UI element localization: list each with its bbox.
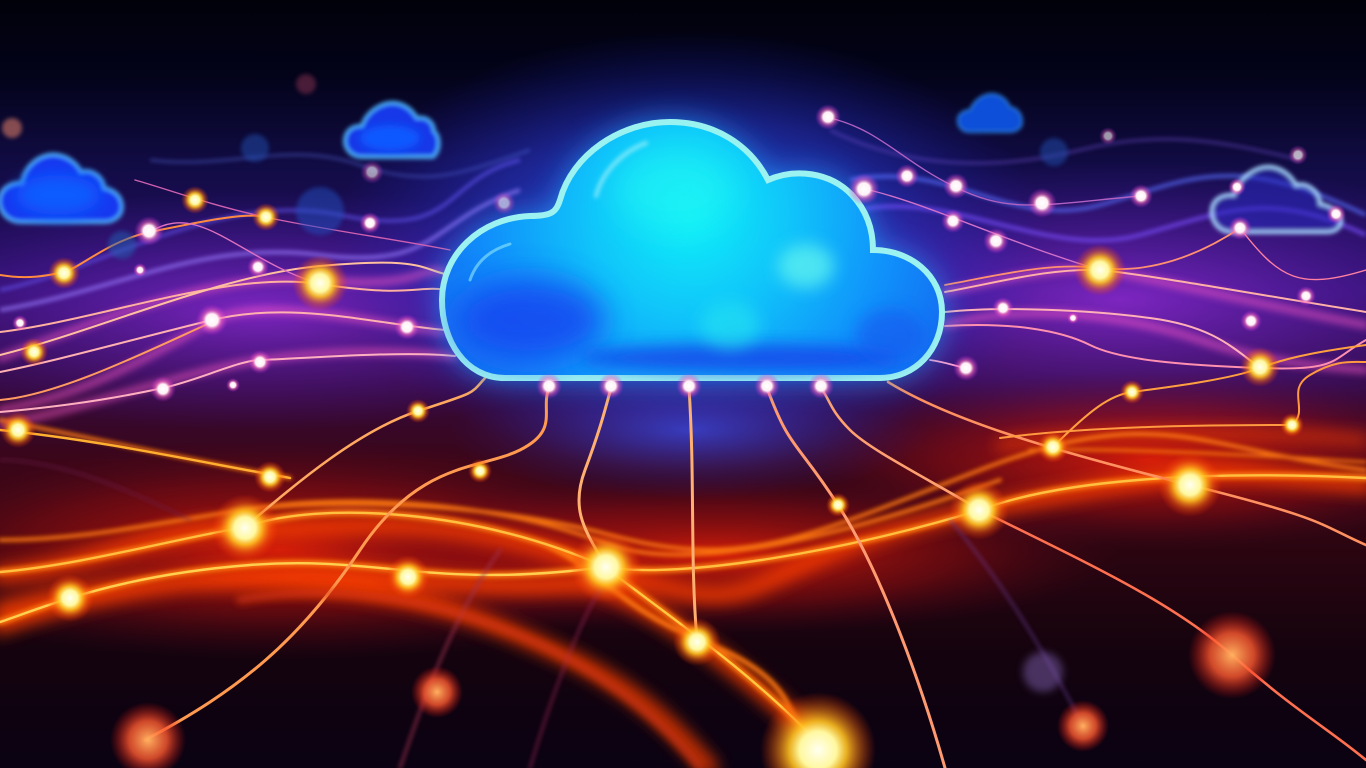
network nodes: large warm xyxy=(0,186,1304,768)
network nodes: small pink and white xyxy=(12,104,1346,402)
cloud highlights xyxy=(596,143,646,196)
central cloud glow xyxy=(442,122,942,378)
central cloud xyxy=(442,122,942,378)
small cloud: far left xyxy=(0,155,122,222)
cloud inner shading xyxy=(455,278,605,362)
side network lines xyxy=(0,118,1366,425)
background wavy haze lines xyxy=(0,130,1366,310)
small cloud: upper right xyxy=(958,94,1022,132)
small cloud: right outline xyxy=(1212,167,1341,232)
small cloud: upper left xyxy=(345,103,439,157)
lower orange network lines xyxy=(0,345,1366,768)
